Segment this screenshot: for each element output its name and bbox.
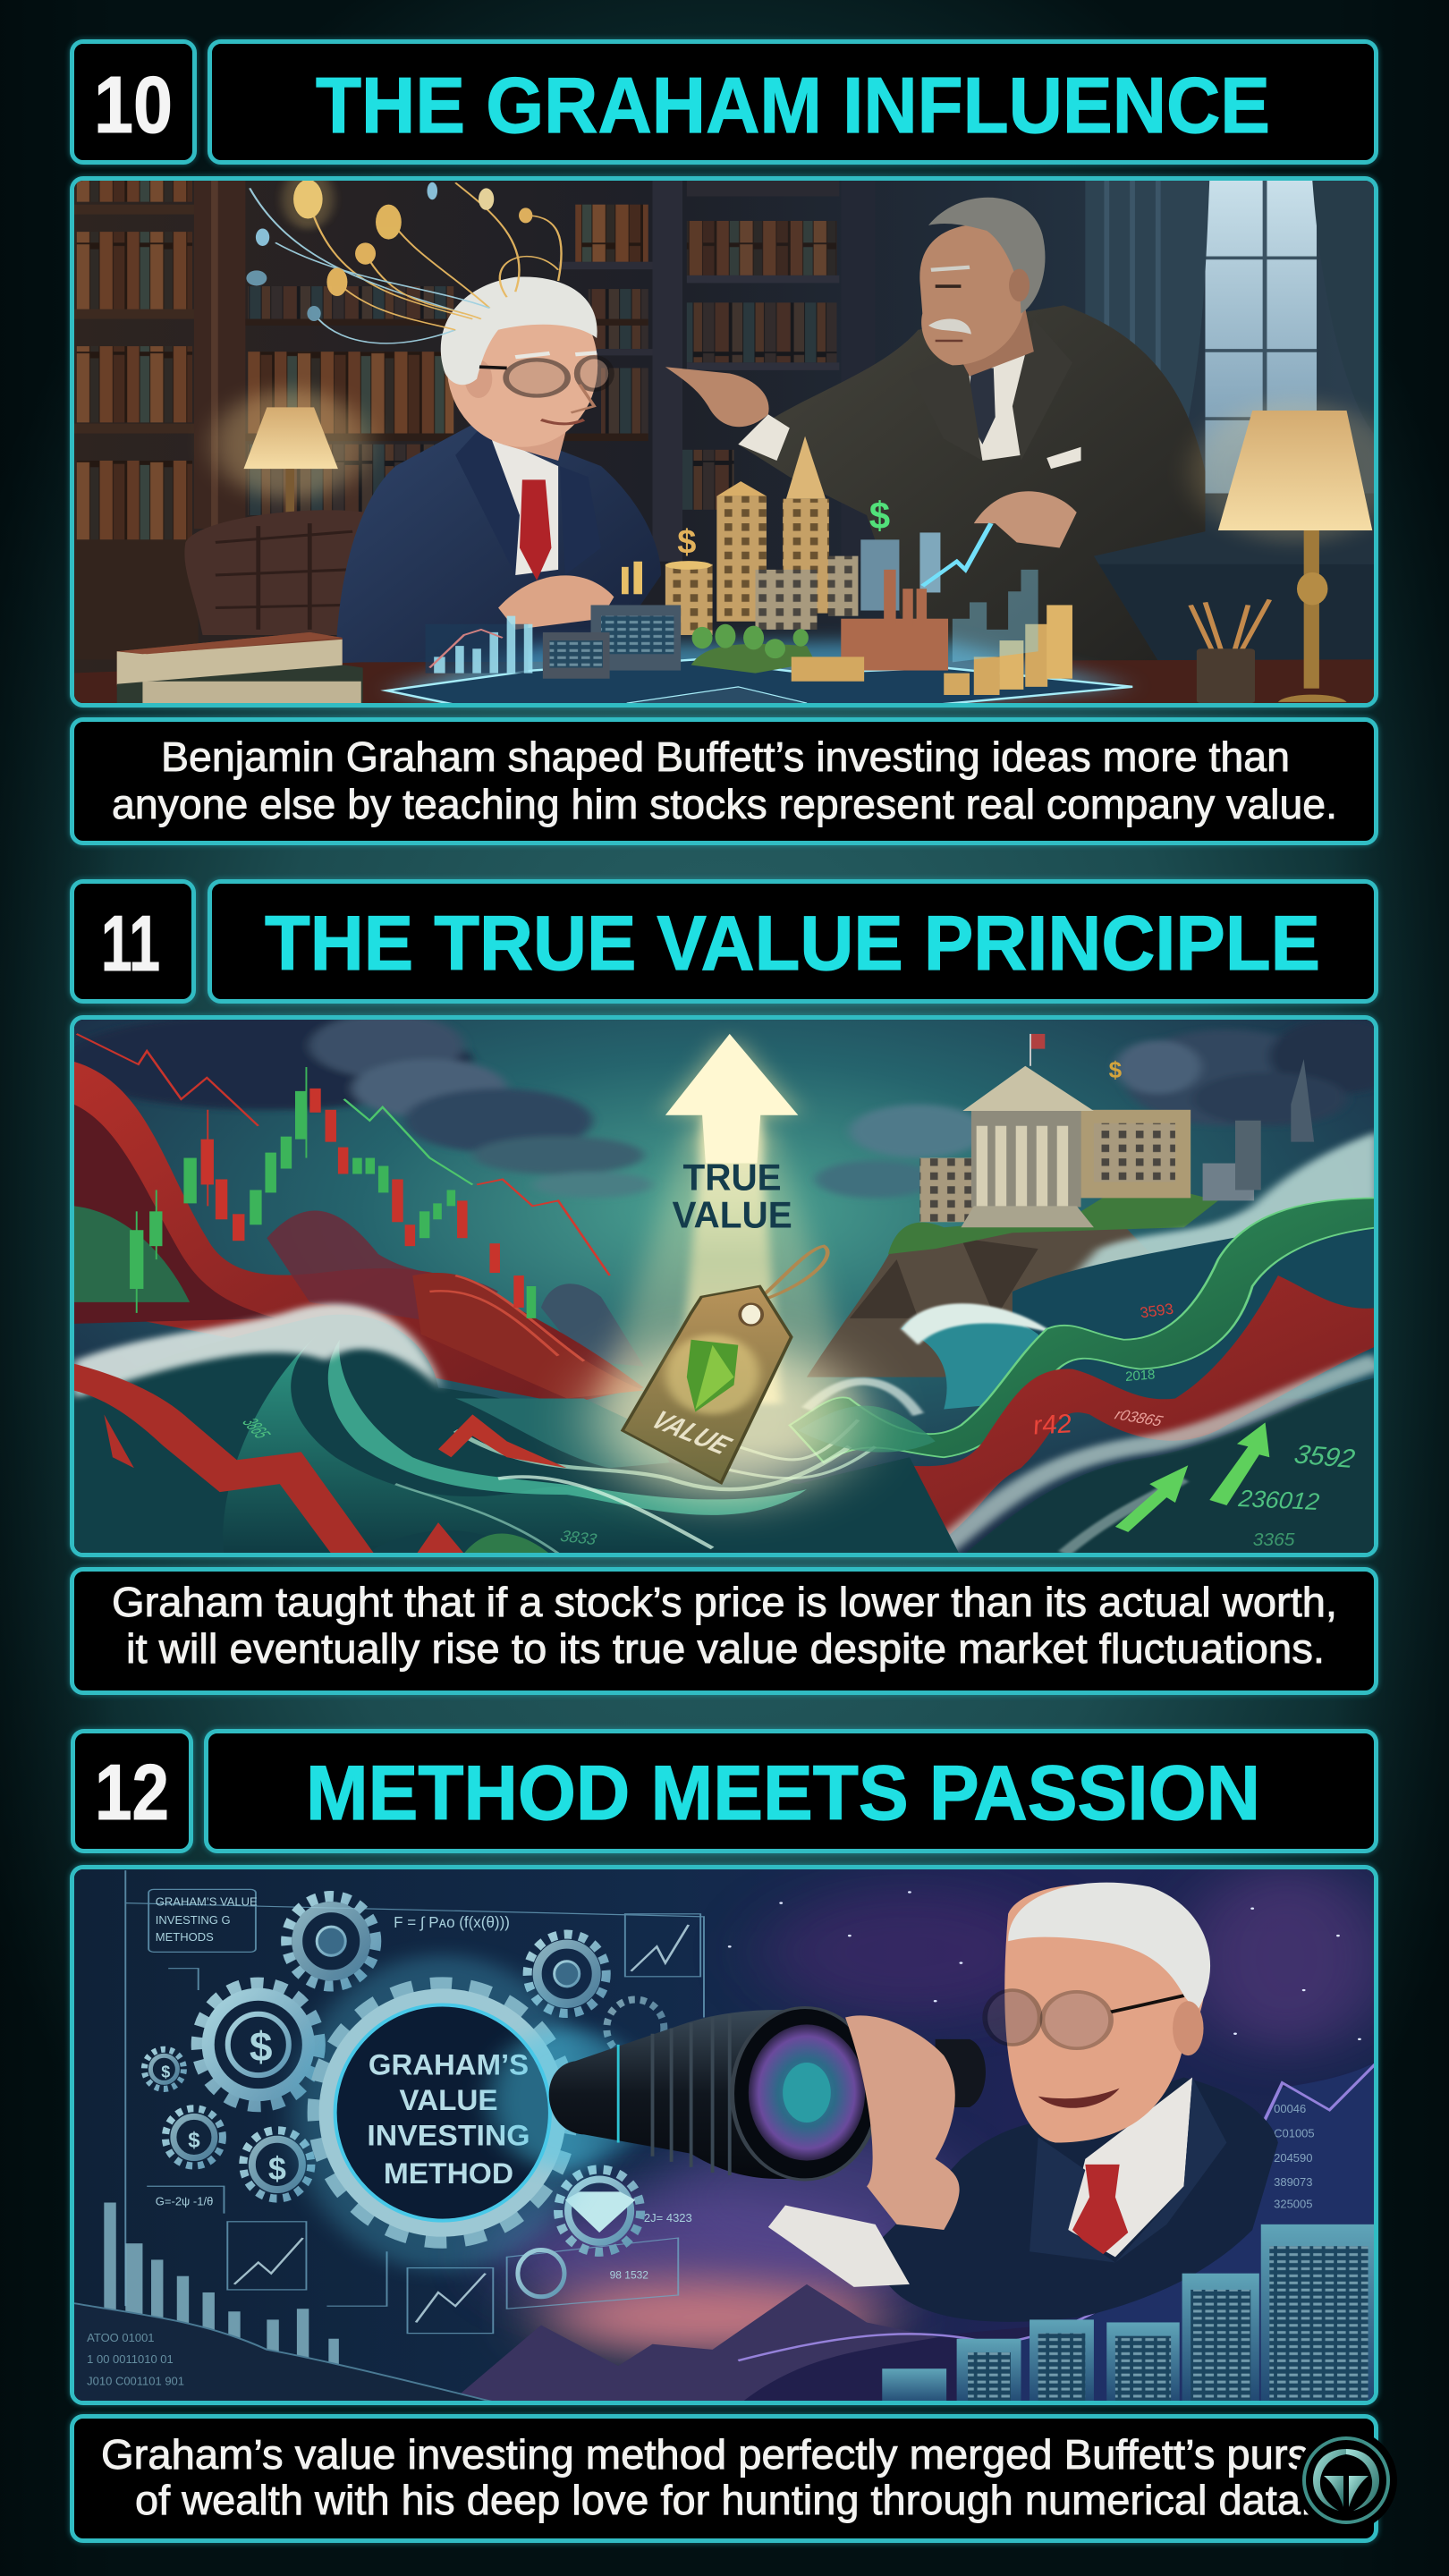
heading: method meets passion	[204, 1729, 1378, 1853]
gear dollar signs and diamond: $	[250, 2023, 272, 2070]
caption: method meets passion: Graham’s value investing method perfectly merged Buffett’s pursuit	[101, 2431, 1353, 2478]
large gear with method title: VALUE	[399, 2084, 498, 2116]
rising light beam	[584, 1115, 876, 1452]
binary digits on left mountain: ATOO 01001	[87, 2331, 155, 2344]
HUD labels: 98 1532	[610, 2269, 648, 2282]
green ribbon	[790, 1198, 1378, 1462]
storm clouds	[61, 1013, 1407, 1198]
icon: corner logo badge	[1296, 2436, 1397, 2524]
right glowing data mountain: 389073	[1274, 2175, 1312, 2189]
illustration: value tag rising above a stormy market	[70, 1015, 1378, 1557]
caption: method meets passion: of wealth with his deep love for hunting through numerical data.	[135, 2477, 1312, 2523]
heading: the Graham influence: THE GRAHAM INFLUENCE	[316, 61, 1270, 149]
green dollar sign: $	[869, 495, 890, 537]
HUD labels: METHODS	[156, 1930, 214, 1944]
caption: true value principle	[70, 1567, 1378, 1695]
gear dollar signs and diamond	[161, 2023, 635, 2233]
red falling arrows	[74, 1364, 567, 1557]
data towers	[882, 2224, 1377, 2405]
caption: Graham influence: anyone else by teaching him stocks represent real company value.	[112, 781, 1337, 827]
right dark sea behind ribbons	[1013, 1206, 1378, 1399]
illustration: Buffett viewing the value investing method through a lens	[70, 1865, 1378, 2405]
right glowing data mountain: 10089	[1166, 2241, 1199, 2254]
HUD labels: F = ∫ Pᴀᴏ (f(x(θ)))	[394, 1914, 510, 1931]
distant rocks	[541, 1284, 644, 1367]
number badge 10: 10	[94, 61, 173, 150]
TRUE VALUE label	[673, 1157, 792, 1235]
right glowing data mountain	[738, 2061, 1378, 2405]
gears	[144, 1896, 664, 2297]
right glowing data mountain: 00046	[1274, 2102, 1306, 2115]
heading: method meets passion: METHOD MEETS PASSION	[306, 1750, 1260, 1836]
binary digits on left mountain	[87, 2331, 184, 2387]
glow around the tag	[597, 1340, 854, 1500]
lower right sea with foam	[936, 1361, 1378, 1557]
number badge 10	[70, 39, 197, 165]
panel: method meets passion	[66, 1725, 1383, 2547]
right red ribbon	[721, 1275, 1378, 1557]
stock numbers in the waves: 2018	[1123, 1367, 1157, 1385]
central and left waves	[74, 1303, 961, 1557]
large gear with method title	[292, 1954, 592, 2271]
caption: Graham influence	[70, 717, 1378, 845]
TRUE VALUE label: TRUE	[683, 1157, 782, 1198]
nebula and stars	[652, 1865, 1389, 2268]
left table lamp	[214, 390, 368, 513]
right glowing data mountain: 10059	[1209, 2219, 1241, 2233]
curling teal wave on the right	[901, 1303, 1063, 1409]
heading: the true value principle: THE TRUE VALUE PRINCIPLE	[265, 901, 1320, 987]
gear dollar signs and diamond: $	[268, 2150, 286, 2187]
chair	[184, 510, 366, 635]
price tag: VALUE	[643, 1407, 739, 1459]
gear dollar signs and diamond: $	[188, 2128, 200, 2152]
Buffett head and hand	[768, 1883, 1210, 2287]
stock numbers in the waves: 3365	[1253, 1530, 1295, 1550]
stock numbers in the waves: r42	[1031, 1409, 1074, 1440]
large gear with method title: GRAHAM’S	[369, 2048, 529, 2080]
binary digits on left mountain: J010 C001101 901	[87, 2374, 184, 2387]
camera lens	[489, 2008, 986, 2180]
large gear with method title: METHOD	[384, 2157, 513, 2190]
large gear with method title: INVESTING	[367, 2120, 530, 2152]
up arrow	[665, 1034, 798, 1164]
right glowing data mountain: C01005	[1274, 2126, 1315, 2140]
left bookcases	[74, 180, 876, 659]
heading: the Graham influence	[208, 39, 1378, 165]
TRUE VALUE label: VALUE	[673, 1194, 792, 1235]
number badge 11: 11	[101, 899, 160, 987]
stacked books	[117, 632, 363, 703]
window and curtains	[1085, 180, 1378, 662]
stock numbers in the waves: 3833	[558, 1527, 598, 1548]
right glowing data mountain: 0050	[1209, 2195, 1235, 2208]
Buffett figure	[335, 276, 661, 674]
right glowing data mountain: 325005	[1274, 2198, 1312, 2211]
HUD labels: 2J= 4323	[644, 2211, 692, 2224]
HUD labels: INVESTING G	[156, 1913, 231, 1927]
stock numbers in the waves: r03865	[1113, 1405, 1165, 1430]
illustration: Graham teaching Buffett in a library	[70, 176, 1378, 708]
binary digits on left mountain: 1 00 0011010 01	[87, 2352, 174, 2366]
right table lamp	[1192, 401, 1398, 702]
bank on a cliff	[807, 1034, 1314, 1377]
stock numbers in the waves: 3593	[1137, 1301, 1176, 1321]
price tag	[623, 1246, 827, 1483]
HUD labels: GRAHAM’S VALUE	[156, 1895, 258, 1909]
number badge 12	[71, 1729, 193, 1853]
stock numbers in the waves: 3592	[1292, 1440, 1358, 1474]
gold dollar sign: $	[677, 523, 696, 562]
Graham figure	[665, 198, 1205, 668]
pencil cup	[1191, 599, 1269, 703]
stock numbers in the waves: 236012	[1236, 1485, 1321, 1515]
stock numbers in the waves	[238, 1301, 1358, 1550]
green rising arrows	[1115, 1422, 1269, 1532]
number badge 12: 12	[95, 1748, 169, 1836]
caption: true value principle: Graham taught that if a stock’s price is lower than its actual worth,	[112, 1579, 1337, 1625]
sunset horizon	[498, 2191, 910, 2355]
right glowing data mountain: 204590	[1274, 2151, 1312, 2165]
gear dollar signs and diamond: $	[161, 2063, 170, 2080]
desk	[70, 659, 1378, 708]
heading: the true value principle	[208, 879, 1378, 1004]
Buffett suit	[850, 2077, 1278, 2322]
left bar chart	[104, 2202, 339, 2366]
right foam	[1030, 1131, 1378, 1335]
distant mountains	[74, 2284, 1081, 2405]
number badge 11	[70, 879, 196, 1004]
left red market ribbons	[74, 1062, 644, 1403]
HUD labels: G=-2ψ -1/θ	[156, 2195, 213, 2208]
HUD labels	[156, 1895, 692, 2282]
caption: method meets passion	[70, 2414, 1378, 2543]
idea threads and light bulbs	[246, 169, 562, 343]
panel: the true value principle	[66, 876, 1382, 1699]
panel: the Graham influence	[66, 36, 1383, 849]
candlestick chart	[77, 1034, 610, 1318]
caption: true value principle: it will eventually rise to its true value despite market fluctuations.	[126, 1625, 1325, 1672]
holographic platform glow	[386, 640, 1132, 705]
stock numbers in the waves: 3865	[238, 1415, 276, 1441]
bank on a cliff: $	[1109, 1058, 1122, 1083]
miniature city and charts	[426, 436, 1072, 695]
caption: Graham influence: Benjamin Graham shaped Buffett’s investing ideas more than	[161, 733, 1290, 780]
holographic HUD panels	[125, 1870, 704, 2334]
